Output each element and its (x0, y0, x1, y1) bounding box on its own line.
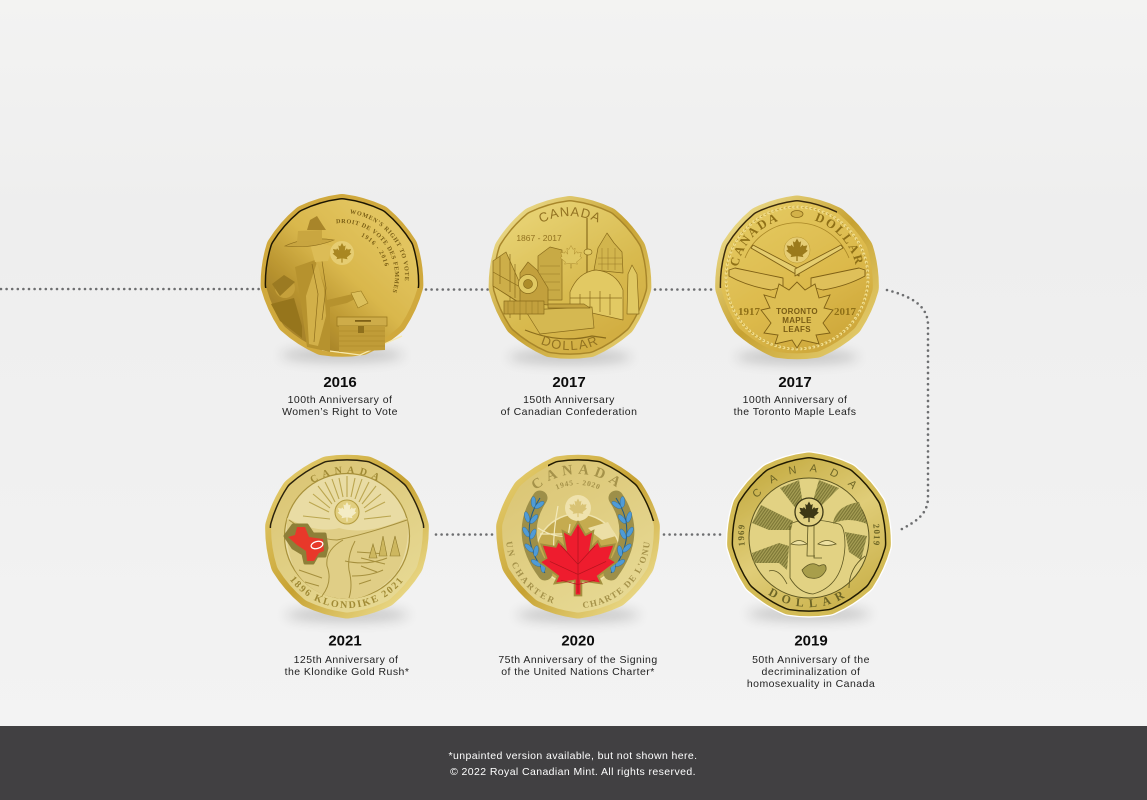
footer bar (0, 726, 1147, 800)
caption: 2016: 2016 (323, 374, 357, 391)
coin legends: 1969 (738, 525, 745, 546)
coin legends: DOLLAR (814, 212, 862, 265)
hatched rays (752, 480, 867, 570)
caption: 2017 Confederation: 2017 (552, 374, 586, 391)
caption: 2017 Confederation: of Canadian Confederation (501, 406, 637, 418)
laurel right (611, 496, 635, 573)
coin: 2017 Canadian Confederation (488, 196, 652, 368)
Maple Leafs logo (761, 282, 833, 348)
coin legends (730, 212, 862, 318)
coin legends (290, 466, 403, 608)
coin legends: 1916 - 2016 (361, 233, 389, 266)
caption: 2019 (747, 632, 875, 690)
caption: 2016: Women’s Right to Vote (282, 406, 398, 418)
red maple leaf (541, 524, 615, 595)
coin legends (506, 464, 650, 608)
caption: 2020: 2020 (561, 632, 595, 650)
caption: 2017 Maple Leafs: 100th Anniversary of (743, 394, 847, 406)
inner medallion (284, 474, 410, 598)
footer note: *unpainted version available, but not shown here. (448, 750, 698, 762)
ballot box (337, 317, 387, 352)
caption: 2020: 75th Anniversary of the Signing (498, 654, 658, 666)
caption: 2021: the Klondike Gold Rush* (285, 666, 409, 678)
caption: 2017 Maple Leafs: the Toronto Maple Leafs (734, 406, 856, 418)
coin legends (516, 207, 598, 350)
caption: 2021: 2021 (328, 632, 362, 650)
caption: 2019: 2019 (794, 632, 828, 650)
coin legends: CANADA (310, 466, 378, 482)
coin legends: WOMEN'S RIGHT TO VOTE (350, 209, 409, 280)
valley landscape (287, 518, 408, 599)
sun and rays (303, 476, 391, 524)
coin: 2020 UN Charter (496, 454, 660, 627)
maple leaf medallion (784, 237, 810, 263)
coin legends: DOLLAR (768, 588, 845, 608)
coin legends: CANADA (532, 464, 619, 488)
coin legends (738, 464, 880, 608)
coin: 2017 Toronto Maple Leafs (715, 196, 879, 368)
caption: 2021: 125th Anniversary of (294, 654, 398, 666)
coin legends: CANADA (753, 464, 856, 497)
caption: 2017 Confederation: 150th Anniversary (523, 394, 615, 406)
puck (791, 210, 803, 218)
hockey sticks (729, 245, 865, 290)
caption: 2021 (285, 632, 409, 678)
Maple Leafs logo: MAPLE (782, 316, 812, 325)
caption: 2019: decriminalization of (762, 666, 860, 678)
caption: 2017 Maple Leafs: 2017 (778, 374, 812, 391)
girl (271, 275, 302, 338)
laurel left (521, 496, 545, 573)
coin legends: DROIT DE VOTE DES FEMMES (336, 219, 400, 293)
coin legends: CHARTE DE L'ONU (582, 542, 650, 608)
coin: 2016 Women's Right to Vote (260, 194, 424, 366)
Maple Leafs logo: LEAFS (783, 325, 811, 334)
face (769, 520, 865, 594)
woman voter (285, 216, 359, 352)
inner arc (745, 223, 849, 258)
coin legends: 1945 - 2020 (556, 480, 600, 490)
coin legends: CANADA (539, 207, 598, 222)
maple leaf medallion (330, 241, 354, 265)
red painted figure (285, 525, 327, 563)
coin legends: UN CHARTER (506, 541, 554, 604)
caption: 2020: of the United Nations Charter* (501, 666, 655, 678)
coin: 2021 Klondike Gold Rush (265, 454, 429, 627)
dotted timeline connector (1, 289, 928, 534)
caption: 2019: 50th Anniversary of the (752, 654, 870, 666)
caption: 2016 (282, 374, 398, 418)
skyline scene (493, 218, 639, 339)
maple leaf (560, 246, 582, 268)
globe (535, 495, 621, 581)
caption: 2019: homosexuality in Canada (747, 678, 875, 690)
beaded ring (726, 207, 868, 349)
coin: 2019 Decriminalization (726, 451, 892, 626)
coin legends: DOLLAR (542, 336, 598, 350)
caption: 2020 (498, 632, 658, 678)
coin legends: 1896 KLONDIKE 2021 (290, 576, 403, 608)
ballot paper (351, 291, 368, 308)
Maple Leafs logo: TORONTO (776, 307, 818, 316)
caption: 2017 Confederation (501, 374, 637, 418)
coin legends: 1917 (738, 306, 760, 318)
maple leaf medallion (795, 498, 823, 526)
coin legends: 1867 - 2017 (516, 233, 562, 243)
copyright: © 2022 Royal Canadian Mint. All rights reserved. (450, 766, 696, 778)
caption: 2016: 100th Anniversary of (288, 394, 392, 406)
caption: 2017 Maple Leafs (734, 374, 856, 418)
coin legends: 2019 (873, 524, 880, 545)
coin legends: CANADA (730, 214, 778, 266)
inner medallion (749, 478, 869, 598)
coin legends: 2017 (834, 306, 856, 318)
